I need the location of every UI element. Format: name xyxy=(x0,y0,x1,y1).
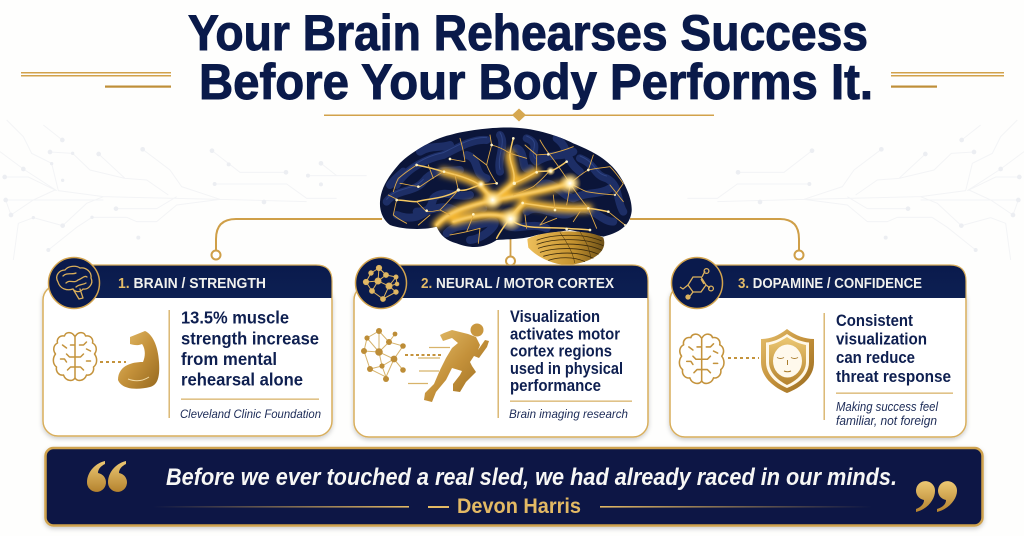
card 1 icon: flexed arm xyxy=(118,331,159,389)
card 2 speed lines xyxy=(408,348,450,384)
card 2 header xyxy=(370,265,648,298)
card 3 source: familiar, not foreign xyxy=(836,414,937,428)
card 3 statement: threat response xyxy=(836,367,951,386)
card 2 header: 2. NEURAL / MOTOR CORTEX xyxy=(421,276,614,292)
title divider with diamond xyxy=(324,108,714,122)
background circuit pattern right xyxy=(687,120,1024,260)
panel: quote banner xyxy=(46,448,982,526)
card 3 header icon: molecule xyxy=(672,258,722,308)
card 1 header: 1. BRAIN / STRENGTH xyxy=(118,276,266,292)
card 2 statement: performance xyxy=(510,377,601,395)
cerebrum xyxy=(380,128,632,247)
glow underlay xyxy=(437,153,588,225)
card 2 header icon: network xyxy=(356,258,406,308)
title ornament left xyxy=(21,72,171,88)
title: Before Your Body Performs It. xyxy=(199,54,873,110)
card 1 dotted connector xyxy=(100,361,126,363)
card 2 statement: activates motor xyxy=(510,326,621,344)
title xyxy=(188,5,873,110)
card 2 source: Brain imaging research xyxy=(509,407,628,421)
card 1 source: Cleveland Clinic Foundation xyxy=(180,407,321,421)
card 3 icon: brain outline xyxy=(679,334,724,383)
attribution: Devon Harris xyxy=(457,495,581,518)
card 3 statement: Consistent xyxy=(836,311,913,330)
card 3 statement xyxy=(836,311,951,386)
connector lines xyxy=(212,219,804,266)
card 1 body xyxy=(43,285,332,436)
card 3 header xyxy=(686,265,966,298)
card 3 icon: shield with calm face xyxy=(761,329,814,393)
card 2 statement: Visualization xyxy=(510,308,600,326)
card 2 statement: used in physical xyxy=(510,360,623,378)
card 2 body xyxy=(354,285,648,437)
main veins xyxy=(397,138,608,238)
background circuit pattern left xyxy=(0,120,367,260)
brain illustration xyxy=(373,122,640,265)
card 1 header xyxy=(60,265,332,298)
card 3 body xyxy=(670,285,966,437)
card 2 icon: neural network xyxy=(361,328,406,382)
card 3 header: 3. DOPAMINE / CONFIDENCE xyxy=(738,276,922,292)
hot spots xyxy=(559,172,581,195)
card 3 statement: visualization xyxy=(836,330,927,348)
card 1 icon: brain outline xyxy=(53,333,97,380)
card 1 statistic xyxy=(181,308,319,390)
card 3 dotted connector xyxy=(728,357,759,359)
title ornament right xyxy=(891,72,1004,88)
cerebellum xyxy=(527,231,604,265)
card 1 statistic: from mental xyxy=(181,349,277,369)
panel: card 2 neural motor cortex xyxy=(354,258,648,437)
card 1 statistic: 13.5% muscle xyxy=(181,308,289,328)
card 3 source: Making success feel xyxy=(836,400,939,414)
closing quote mark xyxy=(916,481,957,512)
card 2 statement: cortex regions xyxy=(510,342,612,360)
opening quote mark xyxy=(87,461,127,492)
quote text: Before we ever touched a real sled, we had already raced in our minds. xyxy=(166,464,897,491)
card 3 source xyxy=(836,400,939,428)
glowing nodes xyxy=(395,137,626,231)
banner background xyxy=(46,448,982,526)
card 1 statistic: rehearsal alone xyxy=(181,370,303,390)
card 2 dotted connector xyxy=(405,354,441,356)
title: Your Brain Rehearses Success xyxy=(188,5,868,61)
card 2 statement xyxy=(510,308,623,395)
panel: card 3 dopamine confidence xyxy=(670,258,966,437)
card 3 statement: can reduce xyxy=(836,348,915,367)
card 2 icon: runner xyxy=(424,324,489,402)
card 1 statistic: strength increase xyxy=(181,328,319,348)
card 1 header icon: brain xyxy=(48,258,100,308)
panel: card 1 brain strength xyxy=(43,258,332,436)
